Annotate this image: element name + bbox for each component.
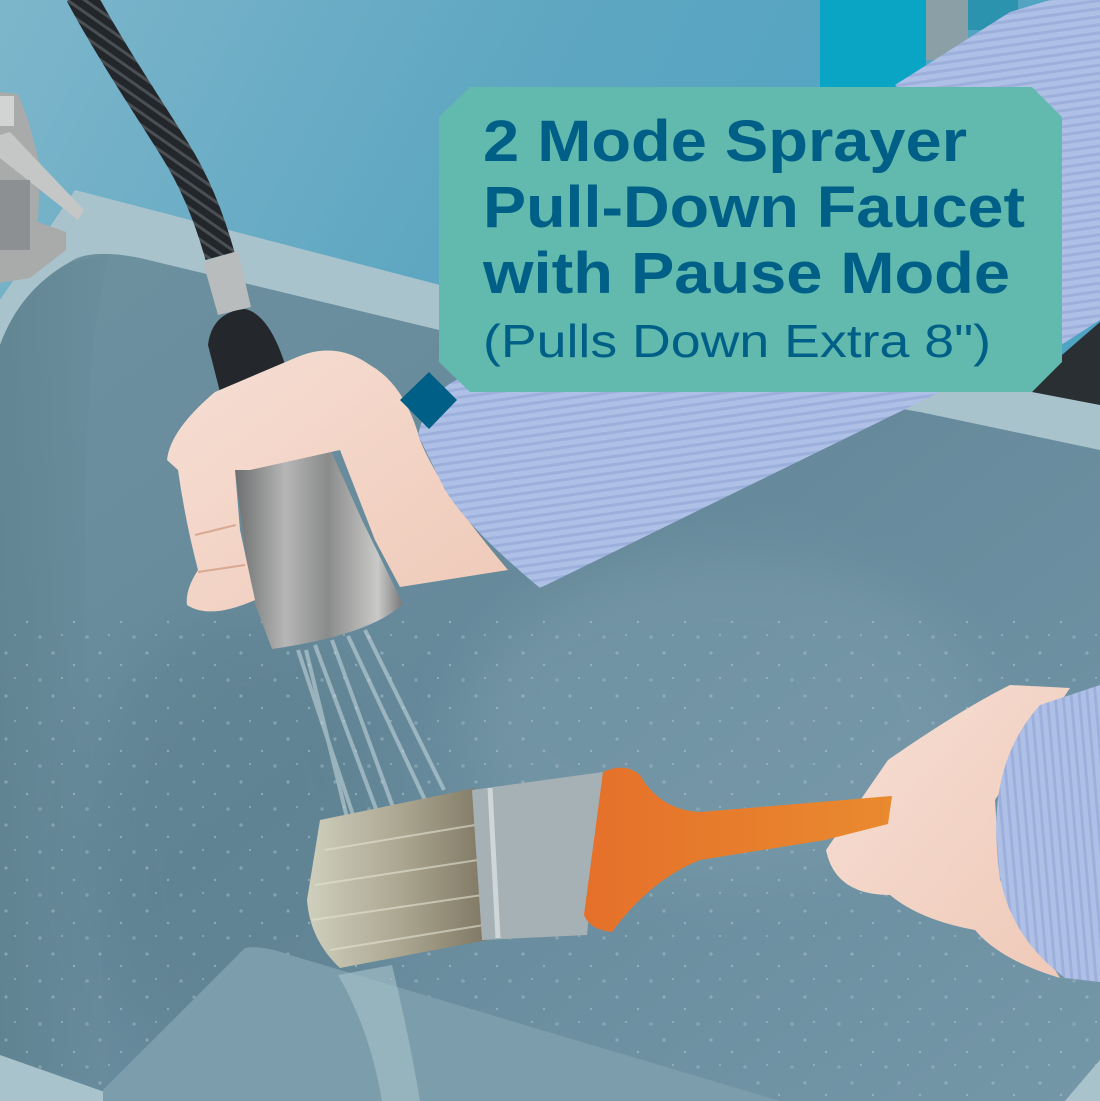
water runoff — [338, 965, 420, 1101]
soap dispenser — [0, 92, 84, 283]
lower sleeve — [996, 685, 1100, 982]
braided hose — [80, 0, 220, 256]
hose collar — [203, 251, 251, 315]
callout heading: with Pause Mode — [482, 241, 1010, 306]
lower hand — [826, 685, 1070, 978]
dark countertop corner — [1032, 322, 1100, 405]
teal wall panel and chrome post — [820, 0, 1018, 90]
sprayer head — [235, 375, 403, 649]
sink basin — [0, 254, 1100, 1101]
ferrule — [472, 772, 603, 940]
paintbrush — [307, 768, 892, 968]
callout heading: 2 Mode Sprayer — [483, 109, 967, 174]
diamond marker — [400, 372, 457, 429]
callout subtitle: (Pulls Down Extra 8") — [483, 315, 991, 367]
upper sleeve — [418, 0, 1100, 588]
handle — [584, 768, 892, 932]
sink front lip and water pool — [0, 947, 1100, 1101]
blue wall background — [0, 0, 1100, 420]
sprayer grip — [208, 309, 289, 392]
callout panel — [439, 87, 1062, 392]
bristles — [307, 788, 487, 968]
upper hand — [167, 350, 508, 611]
water stream — [298, 630, 444, 860]
callout heading — [482, 109, 1025, 306]
callout heading: Pull-Down Faucet — [483, 175, 1025, 240]
